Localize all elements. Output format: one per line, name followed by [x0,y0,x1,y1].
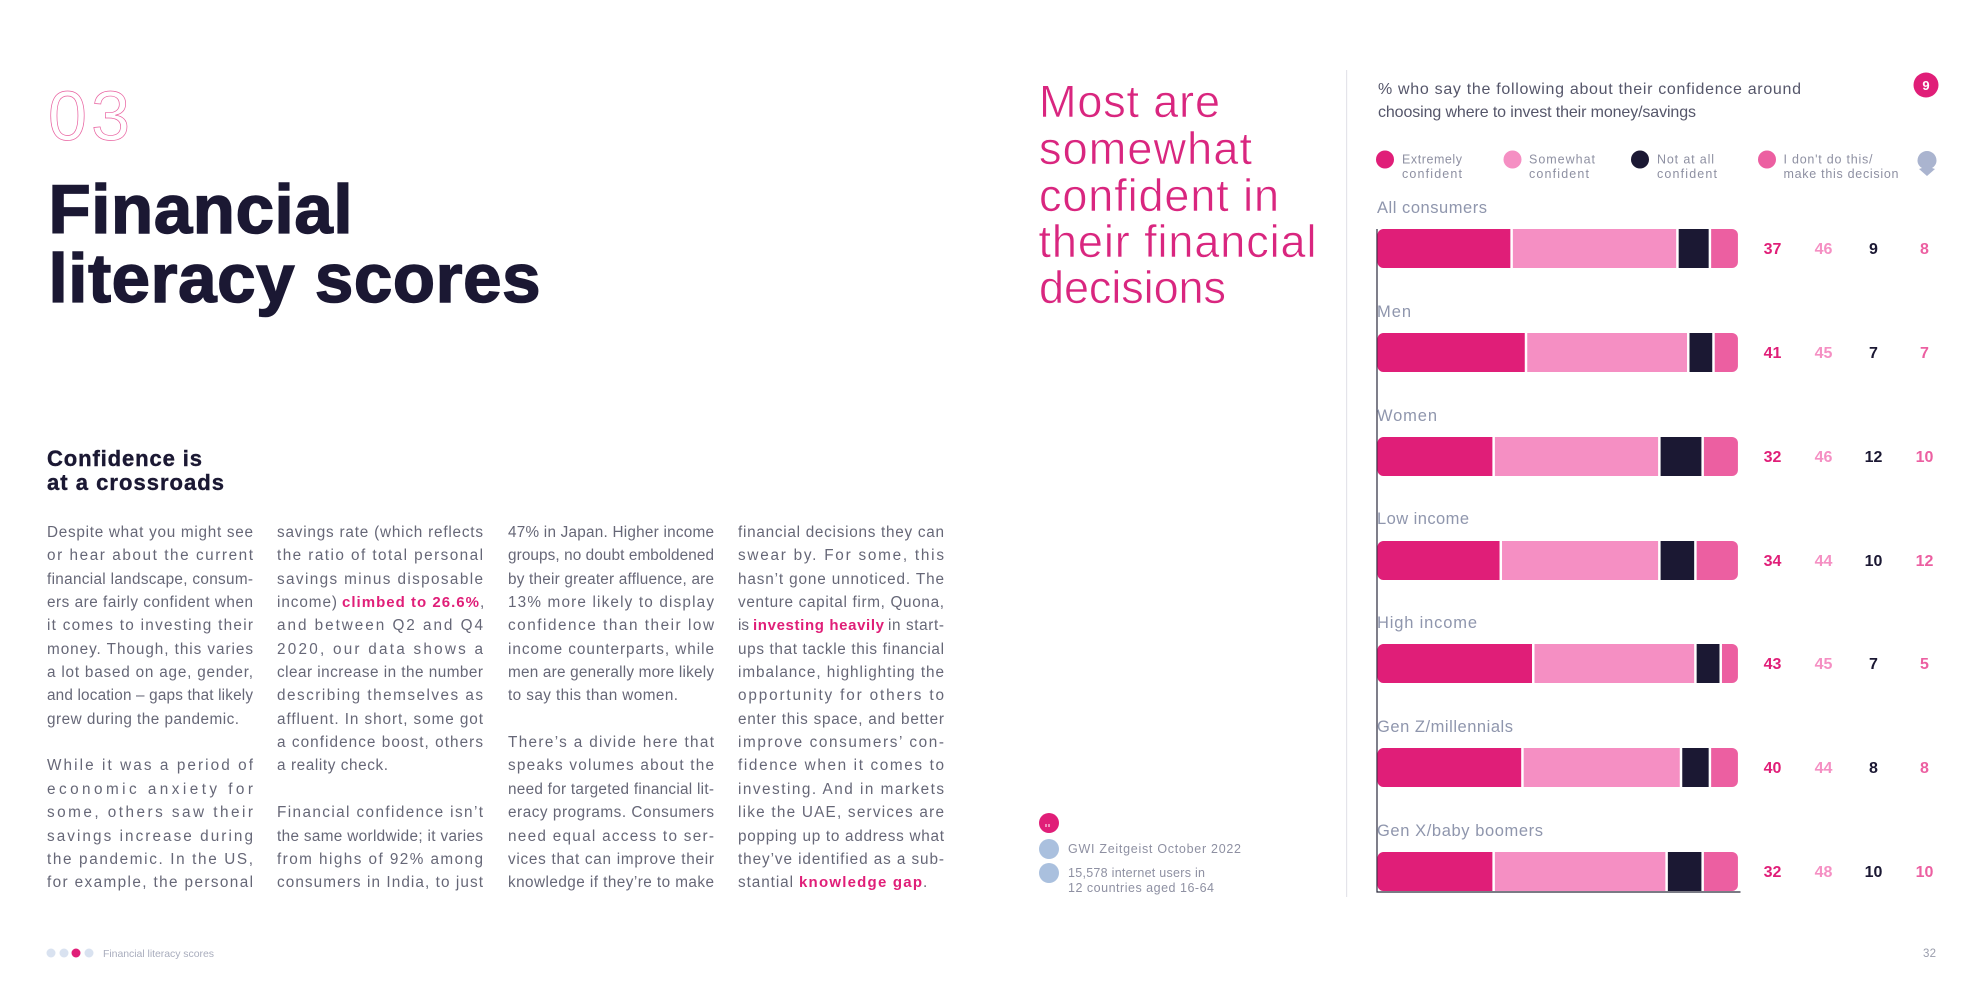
body text column 4: . [923,874,927,891]
row: gen x baby boomers: 48 [1815,864,1832,881]
body text column 3: income counterparts, while [508,641,714,658]
row: women: 46 [1815,449,1832,466]
body text column 3: knowledge if they’re to make [508,874,714,891]
legend: confident [1657,167,1718,181]
body text column 1: a lot based on age, gender, [47,664,253,681]
body text column 3: 47% in Japan. Higher income [508,524,714,541]
row: high income: 43 [1764,656,1782,673]
body text column 4: hasn’t gone unnoticed. The [738,571,944,588]
row: gen x baby boomers: Gen X/baby boomers [1377,822,1543,840]
row: men: 45 [1815,345,1832,362]
body text column 1: and location – gaps that likely [47,687,253,704]
row: all consumers: 37 [1764,241,1782,258]
row: all consumers [1377,199,1929,268]
chart headline: somewhat [1039,123,1252,174]
body text column 3: by their greater affluence, are [508,571,714,588]
row: all consumers: 46 [1815,241,1832,258]
body text column 2: savings minus disposable [277,571,483,588]
body text column 1 [47,524,254,891]
chart headline: their financial [1038,216,1316,267]
body text column 1: money. Though, this varies [47,641,253,658]
chart axes [1377,229,1740,892]
body text column 4 [738,524,945,891]
row: women: Women [1377,407,1437,425]
body text column 2: clear increase in the number [277,664,483,681]
body text column 3 [508,524,715,891]
legend: I don't do this/ [1784,152,1873,166]
body text column 3: to say this than women. [508,687,678,704]
row: men: 7 [1869,345,1878,362]
legend: Somewhat [1529,152,1596,166]
body text column 2: a reality check. [277,757,388,774]
badge [1914,72,1938,98]
body text column 1: savings increase during [47,828,253,845]
row: gen z millennials: Gen Z/millennials [1377,718,1513,736]
body text column 2: the same worldwide; it varies [277,828,483,845]
source notes [1039,813,1241,895]
chart headline: decisions [1039,262,1226,313]
title: Financial [48,171,352,248]
row: gen z millennials: 44 [1815,760,1832,777]
chart question: % who say the following about their confidence around [1378,81,1801,98]
body text column 1: grew during the pandemic. [47,711,239,728]
chart question [1378,81,1801,121]
row: women [1377,407,1934,476]
row: gen z millennials: 8 [1869,760,1878,777]
page number: 32 [1923,948,1936,960]
body text column 4: fidence when it comes to [738,757,944,774]
row: gen z millennials: 8 [1920,760,1929,777]
body text column 3: men are generally more likely [508,664,714,681]
row: low income: 10 [1865,553,1882,570]
body text column 4: knowledge gap [799,874,922,891]
badge: 9 [1922,78,1930,93]
legend: Extremely [1402,152,1463,166]
body text column 1: it comes to investing their [47,617,253,634]
body text column 1: for example, the personal [47,874,253,891]
body text column 1: While it was a period of [47,757,254,774]
legend [1376,150,1899,181]
body text column 1: Despite what you might see [47,524,253,541]
footer navigation: Financial literacy scores [103,948,214,960]
body text column 2: , [480,594,484,611]
body text column 4: opportunity for others to [738,687,944,704]
body text column 1: financial landscape, consum- [47,571,253,588]
body text column 2: affluent. In short, some got [277,711,484,728]
body text column 3: need equal access to ser- [508,828,714,845]
body text column 3: need for targeted financial lit- [508,781,714,798]
body text column 4: ups that tackle this financial [738,641,944,658]
body text column 2 [277,524,484,891]
row: low income: Low income [1377,510,1469,528]
footer navigation [46,948,214,960]
legend: Not at all [1657,152,1714,166]
body text column 4: popping up to address what [738,828,945,845]
body text column 2: Financial confidence isn’t [277,804,484,821]
body text column 2: income) [277,594,337,611]
row: high income: 7 [1869,656,1878,673]
body text column 2: the ratio of total personal [277,547,483,564]
body text column 2: from highs of 92% among [277,851,483,868]
body text column 3: eracy programs. Consumers [508,804,714,821]
row: low income [1377,510,1934,580]
body text column 4: investing heavily [753,617,885,634]
chart headline: confident in [1039,170,1279,221]
body text column 2: consumers in India, to just [277,874,484,891]
row: women: 12 [1865,449,1882,466]
source notes: 12 countries aged 16-64 [1068,881,1214,895]
body text column 4: stantial [738,874,793,891]
body text column 1: ers are fairly confident when [47,594,253,611]
row: gen x baby boomers [1377,822,1934,891]
row: men: Men [1377,303,1411,321]
body text column 2: a confidence boost, others [277,734,483,751]
row: all consumers: 8 [1920,241,1929,258]
row: men: 41 [1764,345,1782,362]
row: high income: High income [1377,614,1477,632]
chart headline: Most are [1039,76,1220,127]
row: gen x baby boomers: 10 [1865,864,1882,881]
icon: legend pin [1918,151,1936,176]
chart headline [1038,76,1316,313]
subheading [47,446,224,495]
body text column 1: the pandemic. In the US, [47,851,253,868]
row: gen x baby boomers: 32 [1764,864,1782,881]
source notes: 15,578 internet users in [1068,866,1205,880]
body text column 2: savings rate (which reflects [277,524,483,541]
legend: confident [1529,167,1590,181]
body text column 4: in start- [888,617,944,634]
row: low income: 12 [1916,553,1934,570]
body text column 3: groups, no doubt emboldened [508,547,714,564]
row: low income: 44 [1815,553,1832,570]
legend: confident [1402,167,1463,181]
body text column 4: improve consumers’ con- [738,734,944,751]
row: gen z millennials [1377,718,1929,787]
row: men [1377,303,1929,372]
body text column 3: speaks volumes about the [508,757,714,774]
row: high income: 5 [1920,656,1929,673]
body text column 1: economic anxiety for [47,781,253,798]
body text column 4: imbalance, highlighting the [738,664,944,681]
body text column 2: 2020, our data shows a [277,641,483,658]
body text column 2: climbed to 26.6% [342,594,479,611]
body text column 4: they’ve identified as a sub- [738,851,944,868]
row: gen z millennials: 40 [1764,760,1782,777]
body text column 1: some, others saw their [47,804,253,821]
body text column 1: or hear about the current [47,547,254,564]
title [48,171,540,317]
body text column 4: is [738,617,749,634]
row: all consumers: All consumers [1377,199,1487,217]
row: high income [1377,614,1929,683]
row: high income: 45 [1815,656,1832,673]
body text column 3: There’s a divide here that [508,734,715,751]
body text column 4: investing. And in markets [738,781,944,798]
body text column 2: describing themselves as [277,687,483,704]
body text column 4: like the UAE, services are [738,804,944,821]
body text column 3: 13% more likely to display [508,594,714,611]
row: all consumers: 9 [1869,241,1878,258]
body text column 4: financial decisions they can [738,524,944,541]
title: literacy scores [48,240,540,317]
body text column 4: swear by. For some, this [738,547,944,564]
body text column 2: and between Q2 and Q4 [277,617,483,634]
row: low income: 34 [1764,553,1782,570]
chart question: choosing where to invest their money/savings [1378,104,1696,121]
section number: 03 [48,77,130,155]
source notes: GWI Zeitgeist October 2022 [1068,842,1241,856]
legend: make this decision [1784,167,1899,181]
body text column 4: venture capital firm, Quona, [738,594,944,611]
subheading: at a crossroads [47,470,224,495]
row: women: 10 [1916,449,1934,466]
body text column 4: enter this space, and better [738,711,944,728]
row: men: 7 [1920,345,1929,362]
row: women: 32 [1764,449,1782,466]
body text column 3: vices that can improve their [508,851,714,868]
subheading: Confidence is [47,446,202,471]
row: gen x baby boomers: 10 [1916,864,1934,881]
body text column 3: confidence than their low [508,617,715,634]
